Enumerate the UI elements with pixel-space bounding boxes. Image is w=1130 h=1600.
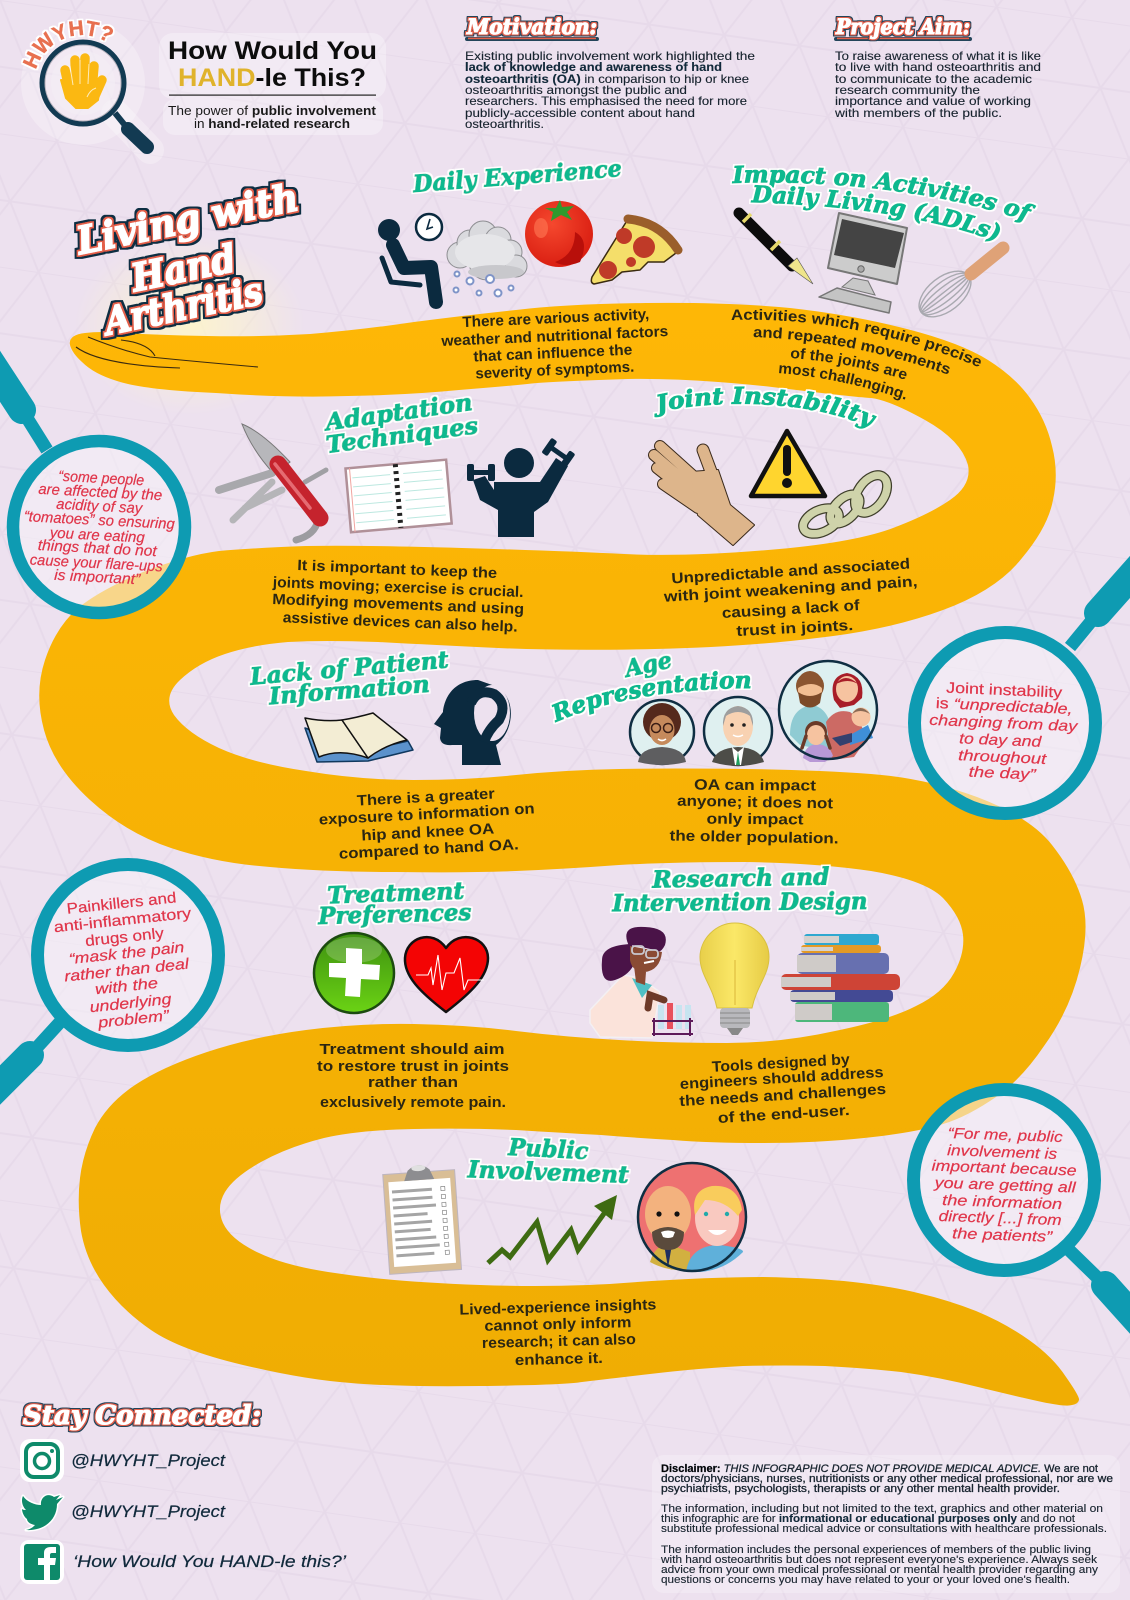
project aim text: research community the [835,83,980,97]
callout: magnifier quote painkillers: problem” [96,1007,171,1032]
body text [732,308,981,400]
body text: most challenging. [779,365,906,400]
panel: stay connected [20,1401,346,1584]
body text: Unpredictable and associated [671,556,911,587]
icon: notebook [345,460,452,532]
body text: severity of symptoms. [475,359,635,382]
body text: rather than [368,1074,458,1091]
callout: magnifier quote tomatoes: acidity of say [56,496,144,517]
callout: magnifier quote public involvement: important because [931,1157,1077,1180]
title line 2: HAND-le This? [178,64,366,92]
icon: heart with pulse [405,937,488,1012]
title line 1: How Would You [168,37,377,65]
panel: impact on ADLs [730,164,1038,400]
body text: anyone; it does not [677,793,833,812]
instagram handle: @HWYHT_Project [71,1451,226,1470]
project aim text: with members of the public. [834,106,1002,120]
callout: magnifier quote tomatoes: are affected by the [38,481,163,504]
body text: hip and knee OA [361,821,495,844]
disclaimer: The information includes the personal experiences of members of the public living [661,1544,1091,1556]
motivation text: researchers. This emphasised the need for more [465,94,747,108]
callout: magnifier quote joint instability: to day and [959,730,1042,751]
callout: magnifier quote joint instability: the day” [968,764,1037,784]
icon: pen [739,213,813,284]
panel: research and intervention design [590,863,900,1127]
callout: magnifier quote joint instability: Joint instability [946,679,1063,702]
callout: magnifier quote public involvement: directly [...] from [938,1208,1062,1229]
disclaimer: doctors/physicians, nurses, nutritionists or any other medical professional, nor are we [661,1473,1113,1485]
body text: research; it can also [482,1331,636,1352]
panel: adaptation techniques [219,389,575,636]
panel: project aim [834,14,1041,120]
callout: magnifier quote tomatoes: things that do not [37,537,158,560]
body text: the older population. [669,828,839,847]
body text: of the joints are [790,348,906,379]
heading: Research and [651,863,830,894]
heading [248,646,450,710]
callout: magnifier quote painkillers: anti-inflammatory [53,905,193,936]
project aim text: To raise awareness of what it is like [835,49,1041,63]
panel: lack of patient information [248,646,535,863]
icon: twitter [22,1495,63,1530]
icon: facebook [20,1540,64,1584]
heading: Adaptation [322,389,474,437]
heading [317,878,472,930]
icon: broken chain [799,469,894,539]
callout: magnifier quote tomatoes: “tomatoes” so ensuring [23,508,176,533]
disclaimer: substitute professional medical advice or consultations with healthcare professionals. [661,1523,1107,1535]
body text: exclusively remote pain. [320,1094,506,1111]
callout: magnifier quote public involvement: the information [942,1192,1062,1213]
heading: Joint Instability [653,385,878,430]
body text [459,1296,657,1369]
body text [317,1041,509,1111]
body text: engineers should address [679,1064,884,1093]
icon: raised hand [61,58,102,108]
panel: motivation [465,14,755,131]
body text: with joint weakening and pain, [662,573,918,606]
subtitle: The power of public involvement [168,103,377,118]
icon: instagram [20,1439,64,1482]
icon: pizza slice [591,219,680,284]
heading: Intervention Design [611,888,868,917]
icon: computer [819,213,907,313]
motivation text: osteoarthritis amongst the public and [465,83,687,97]
callout: magnifier quote joint instability [914,560,1130,814]
callout: magnifier quote tomatoes: you are eating [48,524,146,547]
body text: weather and nutritional factors [440,323,669,350]
disclaimer: with hand osteoarthritis but does not represent everyone's experience. Always seek [660,1554,1098,1566]
heading: motivation: Motivation: [466,14,597,39]
body text: enhance it. [515,1350,603,1369]
icon: snow cloud [447,221,527,296]
body text: only impact [706,811,804,828]
body text: exposure to information on [318,800,535,829]
logo text: HWYHT? [21,18,114,70]
panel: daily experience [378,155,680,382]
body text: of the end-user. [717,1102,850,1127]
body text: cannot only inform [484,1314,632,1335]
panel: joint instability [648,385,918,640]
callout: magnifier quote tomatoes: cause your flare-ups [29,552,164,576]
heading: Age [621,647,674,683]
disclaimer: psychiatrists, psychologists, therapists or any other mental health provider. [661,1483,1060,1495]
icon: scientist [590,927,693,1038]
motivation text: Existing public involvement work highlighted the [465,49,755,63]
heading [611,863,868,917]
body text [440,306,669,382]
winding ribbon arm [39,303,1086,1406]
body text: and repeated movements [754,328,950,374]
callout: magnifier quote tomatoes [0,358,185,613]
motivation text: osteoarthritis (OA) in comparison to hip or knee [465,72,749,86]
disclaimer [652,1455,1120,1593]
callout: magnifier quote joint instability: throughout [958,747,1048,768]
icon: clipboard [382,1163,462,1274]
callout: magnifier quote painkillers: underlying [89,991,173,1016]
heading: Treatment [327,878,465,909]
project aim text: importance and value of working [835,94,1031,108]
motivation text: lack of knowledge and awareness of hand [465,60,722,74]
callout: magnifier quote public involvement: you are getting all [933,1175,1077,1196]
body text: Lived-experience insights [459,1296,657,1319]
icon: arthritic hand [654,446,754,545]
callout: magnifier quote public involvement [914,1090,1130,1335]
body text: Modifying movements and using [272,591,524,618]
main title: Living with Hand Arthritis [72,174,302,344]
disclaimer: questions or concerns you may have related to your or your loved one's health. [661,1574,1070,1586]
motivation text: osteoarthritis. [465,117,544,131]
icon: palm lines on hand [76,337,258,368]
body text: joints moving; exercise is crucial. [271,574,524,601]
body text: compared to hand OA. [338,836,519,863]
body text: It is important to keep the [297,557,497,582]
icon: family avatar [779,661,877,762]
callout: magnifier quote painkillers [0,864,218,1100]
icon: open book [305,713,413,762]
body text: trust in joints. [736,617,854,640]
heading: Preferences [317,899,472,930]
body text: There is a greater [356,785,495,810]
main title: Living with Hand Arthritis: Living with [72,174,302,263]
motivation text [465,49,755,131]
callout: magnifier quote painkillers: “mask the pain [68,939,185,968]
callout: magnifier quote public involvement: involvement is [947,1142,1058,1163]
icon: avatar older man [704,697,772,766]
body text [318,785,535,863]
icon: multi-tool knife [219,424,326,540]
icon: person lifting dumbbells [467,438,575,537]
body text: to restore trust in joints [317,1058,509,1075]
body text [662,556,918,640]
panel: public involvement [382,1134,746,1369]
callout: magnifier quote public involvement: “For me, public [947,1125,1063,1146]
heading: Involvement [466,1156,630,1189]
icon: head with question mark [434,680,511,765]
body text: There are various activity, [462,306,650,331]
motivation text: publicly-accessible content about hand [465,106,695,120]
heading: Techniques [324,412,480,459]
panel: treatment preferences [314,878,509,1111]
callout: magnifier quote painkillers: drugs only [84,925,165,950]
icon: rising graph arrow [488,1195,617,1263]
heading: Daily Living (ADLs) [749,184,1002,243]
icon: two people avatar [638,1163,746,1272]
icon: avatar woman [630,700,694,765]
body text: Activities which require precise [732,308,981,366]
heading [466,1134,630,1189]
heading: Impact on Activities of [730,164,1038,224]
twitter handle: @HWYHT_Project [71,1502,226,1521]
body text [679,1051,887,1127]
callout: magnifier quote joint instability: is “unpredictable, [935,695,1073,718]
logo: HWYHT magnifier with hand [21,18,162,157]
project aim text: to communicate to the academic [835,72,1032,86]
project aim text [834,49,1041,120]
heading [322,389,480,459]
project aim text: to live with hand osteoarthritis and [835,60,1041,74]
heading: Representation [550,670,752,724]
icon: green plus [314,933,394,1013]
body text: causing a lack of [721,597,861,622]
panel: age representation [550,647,878,847]
icon: light bulb [700,923,769,1035]
disclaimer: this infographic are for informational or educational purposes only and do not [661,1513,1075,1525]
heading: project aim: Project Aim: [835,14,970,39]
title block [159,33,386,135]
disclaimer: advice from your own medical professional or mental health provider regarding any [661,1564,1099,1576]
body text: Treatment should aim [320,1041,504,1058]
body text [669,776,839,847]
callout: magnifier quote painkillers: with the [94,975,159,998]
body text: the needs and challenges [679,1081,887,1110]
heading: Public [507,1134,589,1165]
main title: Living with Hand Arthritis: Hand [126,235,239,300]
disclaimer: Disclaimer: THIS INFOGRAPHIC DOES NOT PROVIDE MEDICAL ADVICE. We are not [661,1463,1098,1475]
icon: whisk [911,248,1003,326]
body text: Tools designed by [711,1051,851,1076]
body text: OA can impact [694,776,816,795]
disclaimer: The information, including but not limited to the text, graphics and other material on [661,1503,1103,1515]
icon: stack of books [781,934,900,1022]
heading: Stay Connected: [23,1401,261,1431]
heading: Information [267,671,431,710]
callout: magnifier quote joint instability: changing from day [929,712,1079,735]
icon: seated person and clock [378,214,442,302]
icon: tomato [525,200,593,267]
callout: magnifier quote painkillers: rather than deal [63,955,190,986]
heading: Daily Experience [411,155,623,198]
body text [271,557,524,636]
body text: that can influence the [473,342,633,365]
heading: Lack of Patient [248,646,450,691]
title block: in hand-related research [194,116,350,131]
callout: magnifier quote tomatoes: is important” [54,567,142,588]
body text: assistive devices can also help. [282,609,518,636]
callout: magnifier quote tomatoes: “some people [58,468,145,489]
icon: warning triangle [751,431,825,496]
callout: magnifier quote painkillers: Painkillers and [66,889,177,918]
callout: magnifier quote public involvement: the patients” [952,1225,1054,1246]
facebook name: ‘How Would You HAND-le this?’ [73,1552,346,1571]
main title: Living with Hand Arthritis: Arthritis [98,268,266,344]
